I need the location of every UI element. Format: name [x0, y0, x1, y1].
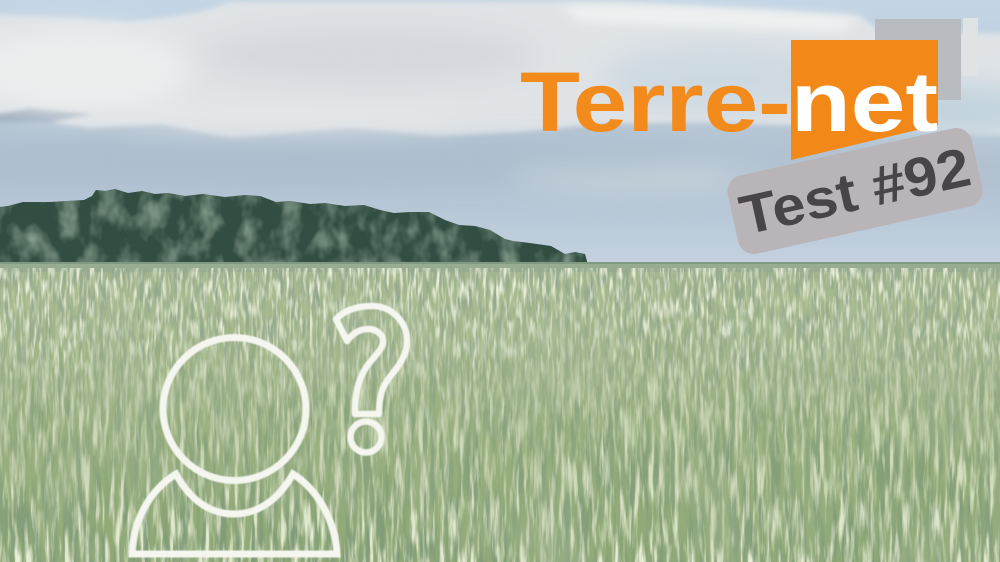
badge: Test #92 [724, 125, 986, 257]
logo background squares [875, 18, 978, 100]
sky background [0, 0, 1000, 264]
logo: Terre-net wordmark: Terre- net [520, 55, 938, 149]
tree line on the horizon [0, 189, 587, 263]
clouds [0, 2, 1000, 191]
icon: person outline [132, 338, 337, 554]
icon: question mark outline [336, 306, 407, 452]
logo: orange block [791, 40, 938, 160]
wheat field [0, 262, 1000, 562]
badge: Test #92: Test #92 [734, 135, 976, 247]
